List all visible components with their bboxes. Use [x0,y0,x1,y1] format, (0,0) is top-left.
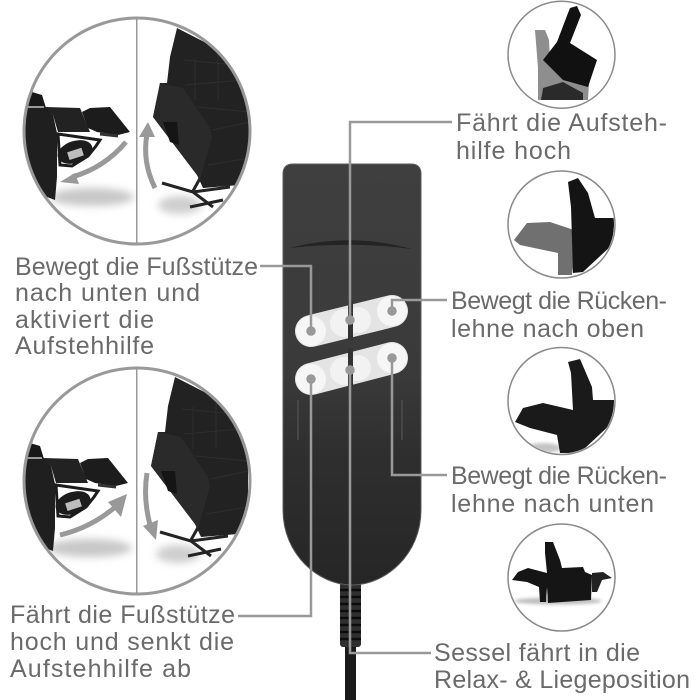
label: backrest down: Bewegt die Rücken- [451,462,667,490]
label: lift up [456,109,667,165]
circle outline [508,1,615,108]
label: lift up: hilfe hoch [456,137,571,165]
label: backrest up: lehne nach oben [451,315,644,343]
cable [345,646,356,700]
label: backrest down [451,462,667,518]
panel: backrest down [508,348,615,454]
circle outline [24,18,250,244]
circle outline [508,171,615,278]
strain relief [340,582,361,647]
right chair raised on lift [153,28,250,214]
label: footrest up [10,601,235,683]
label: footrest down: nach unten und [15,279,200,307]
right chair on lift [151,377,248,563]
label: footrest down [15,253,258,360]
label: backrest up: Bewegt die Rücken- [451,287,667,315]
label: footrest up: hoch und senkt die [10,628,234,656]
left chair with footrest [18,443,132,557]
arrow: footrest moves up [60,494,127,535]
label: backrest down: lehne nach unten [451,490,654,518]
remote control [283,164,421,700]
label: footrest down: aktiviert die [15,306,154,334]
label: backrest up [451,287,667,343]
left chair reclined with footrest [20,92,134,206]
chair silhouettes [535,6,597,100]
chair silhouettes [514,178,615,275]
circle outline [508,524,615,631]
arrow: footrest moves down [60,142,126,184]
panel: lift raised chair [508,1,615,108]
label: relax position: Relax- & Liegeposition [434,666,690,694]
label: footrest down: Aufstehhilfe [15,332,154,360]
body shading [289,240,412,440]
label: relax position: Sessel fährt in die [434,639,640,667]
leader lines and dots [238,122,452,653]
circle outline [24,368,250,594]
label: footrest up: Aufstehhilfe ab [10,655,191,683]
remote body [283,164,421,585]
chair silhouettes [512,542,612,604]
panel: footrest up and lift down [18,368,250,594]
divider line [136,18,138,244]
divider line [136,368,138,594]
panel: relax position [508,524,615,631]
panel: backrest up [508,171,615,278]
label: footrest up: Fährt die Fußstütze [10,601,235,629]
label: relax position [434,639,690,694]
chair silhouettes [515,359,615,453]
circle outline [508,348,615,454]
upper buttons [296,296,407,346]
label: footrest down: Bewegt die Fußstütze [15,253,258,281]
arrow: lift moves up [139,122,155,188]
label: lift up: Fährt die Aufsteh- [456,109,667,137]
arrow: lift moves down [143,473,158,540]
lower buttons [296,343,407,394]
panel: footrest down and lift up [20,18,250,244]
